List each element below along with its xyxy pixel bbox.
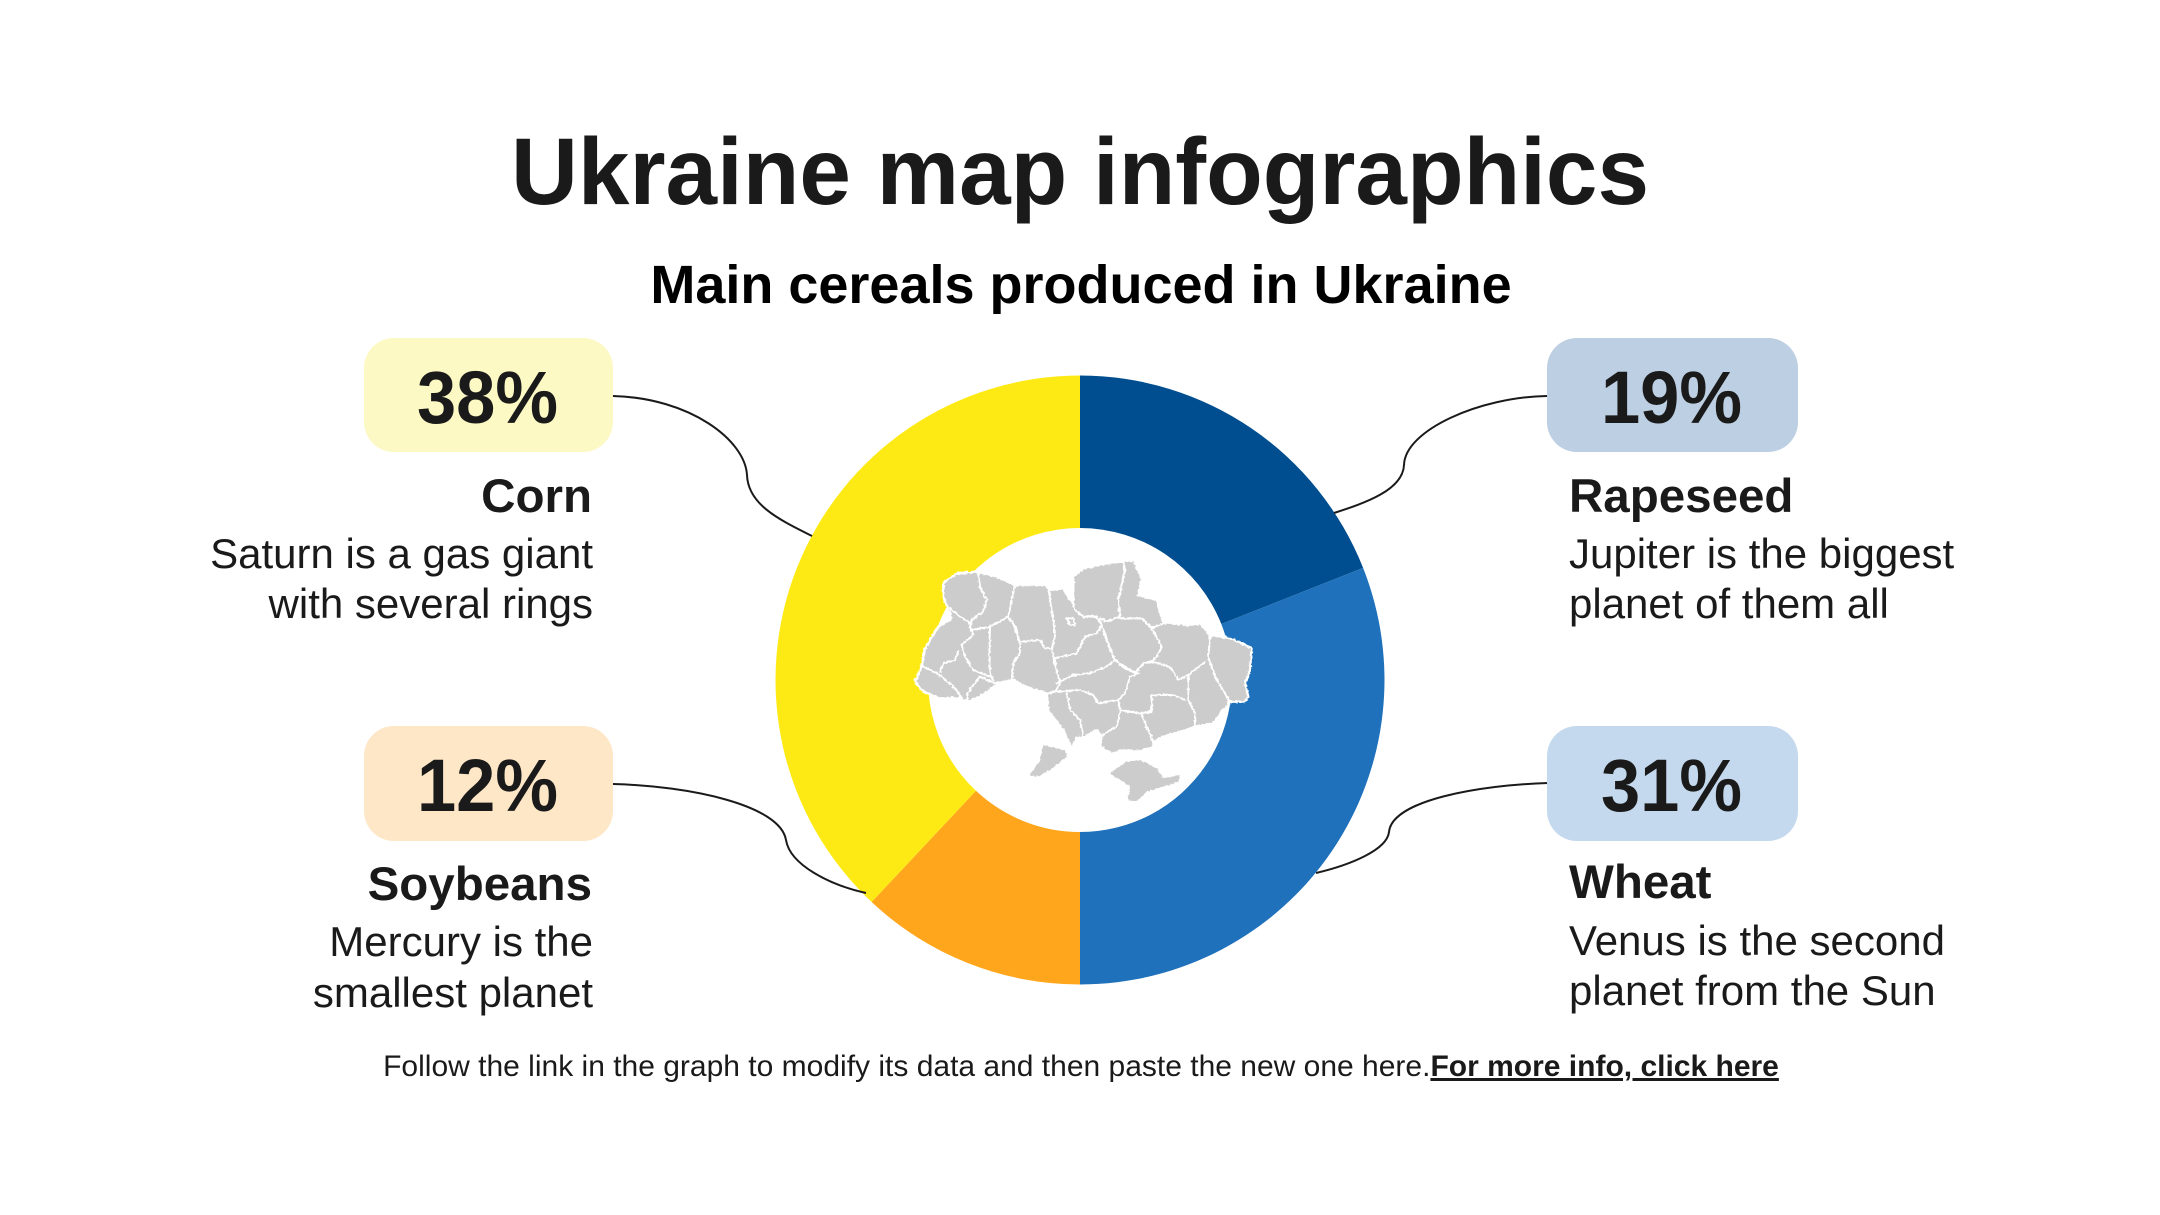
oblast borders [923, 562, 1230, 742]
panel: rapeseed [1547, 338, 1955, 627]
description: rapeseed: Jupiter is the biggest [1569, 530, 1955, 577]
description: soybeans: smallest planet [313, 969, 593, 1016]
segment: rapeseed 19% [1080, 376, 1363, 624]
panel: soybeans [313, 726, 613, 1016]
badge: corn percentage: 38% [417, 356, 558, 439]
description: corn: with several rings [268, 580, 593, 627]
label: soybeans: Soybeans [368, 858, 592, 911]
description: wheat: Venus is the second [1569, 917, 1945, 964]
segment: wheat 31% [1080, 568, 1384, 984]
badge: wheat percentage: 31% [1601, 744, 1742, 827]
description: soybeans: Mercury is the [329, 918, 593, 965]
label: rapeseed: Rapeseed [1569, 470, 1793, 523]
description: rapeseed: planet of them all [1569, 580, 1889, 627]
badge: rapeseed percentage [1547, 338, 1798, 452]
segment: corn 38% [776, 376, 1080, 902]
description: wheat: planet from the Sun [1569, 967, 1936, 1014]
connector: soybeans [613, 784, 866, 893]
badge: corn percentage [364, 338, 613, 452]
donut chart [776, 376, 1384, 984]
description: corn: Saturn is a gas giant [210, 530, 593, 577]
label: wheat: Wheat [1569, 856, 1712, 909]
connector: wheat [1316, 783, 1548, 873]
title: Ukraine map infographics [511, 119, 1649, 225]
connector: corn [613, 396, 812, 536]
badge: wheat percentage [1547, 726, 1798, 841]
subtitle: Main cereals produced in Ukraine [650, 255, 1512, 315]
panel: corn [210, 338, 613, 627]
Budjak region [1030, 745, 1067, 777]
mainland silhouette [915, 560, 1252, 753]
panel: wheat [1547, 726, 1945, 1014]
connector: rapeseed [1334, 396, 1547, 513]
segment: soybeans 12% [872, 791, 1080, 984]
Crimea [1110, 760, 1180, 802]
badge: soybeans percentage: 12% [417, 744, 558, 827]
label: corn: Corn [481, 470, 592, 523]
icon: map of Ukraine [915, 560, 1252, 802]
badge: soybeans percentage [364, 726, 613, 841]
badge: rapeseed percentage: 19% [1601, 356, 1742, 439]
footer note: Follow the link in the graph to modify its data and then paste the new one here.For more info, click here [383, 1050, 1779, 1083]
